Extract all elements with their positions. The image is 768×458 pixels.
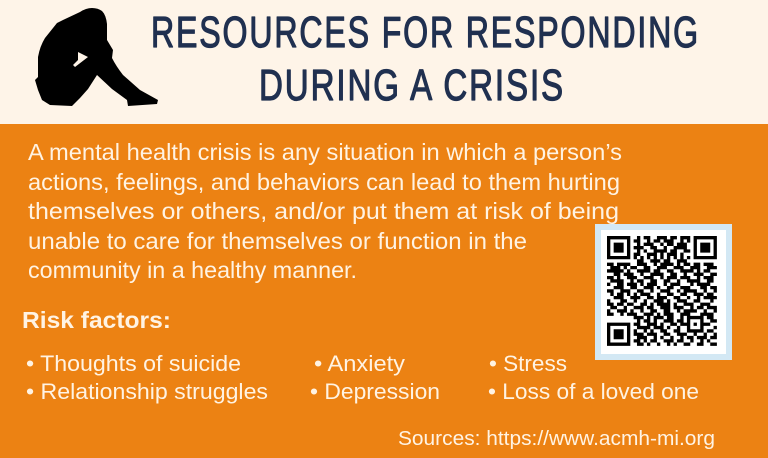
text block: crisis definition: actions, feelings, and behaviors can lead to them hurting (28, 169, 620, 195)
title: DURING A CRISIS (259, 61, 565, 110)
icon: QR modules (607, 238, 717, 344)
heading: risk factors: Risk factors: (22, 307, 171, 333)
text block: crisis definition: themselves or others, and/or put them at risk of being (28, 198, 619, 224)
text block: crisis definition: unable to care for themselves or function in the (28, 228, 527, 254)
text block: crisis definition: community in a healthy manner. (28, 257, 357, 283)
title (151, 8, 700, 110)
list: risk factors: • Relationship struggles (26, 379, 268, 404)
list: risk factors: • Thoughts of suicide (26, 351, 241, 376)
list: risk factors: • Depression (310, 379, 440, 404)
text block: sources: Sources: https://www.acmh-mi.org (398, 428, 715, 450)
list: risk factors (26, 351, 699, 404)
text block: crisis definition (28, 139, 622, 283)
list: risk factors: • Anxiety (314, 351, 405, 376)
panel: header band (0, 0, 768, 124)
list: risk factors: • Loss of a loved one (488, 379, 699, 404)
icon: crouching person silhouette (35, 8, 158, 106)
list: risk factors: • Stress (489, 351, 567, 376)
panel: orange body (0, 124, 768, 458)
panel: QR code (595, 224, 732, 360)
text block: crisis definition: A mental health crisis is any situation in which a person’s (28, 139, 622, 165)
